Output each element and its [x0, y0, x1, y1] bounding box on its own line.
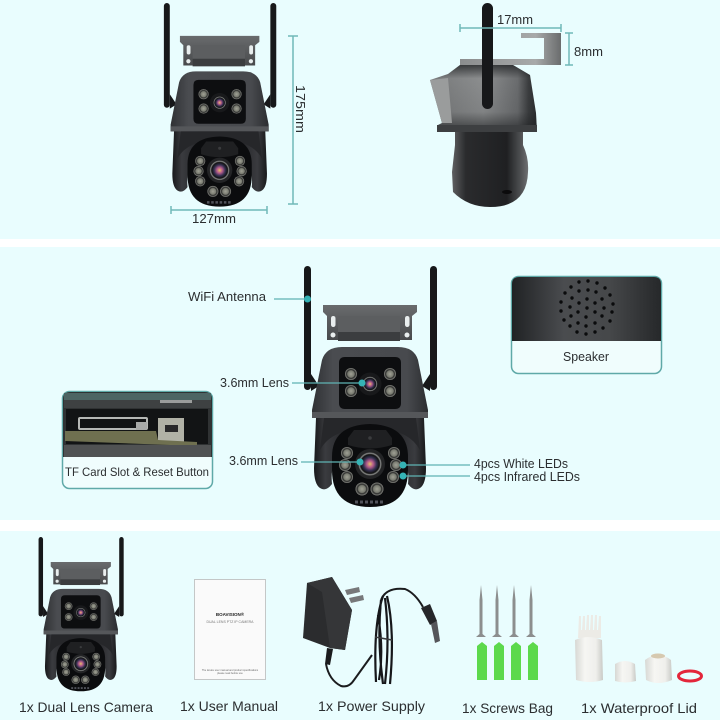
callout: white LEDs [400, 457, 568, 471]
width dimension: 127mm [192, 211, 236, 226]
panel: dimensions background [0, 0, 720, 239]
callout: lower lens: 3.6mm Lens [229, 454, 298, 468]
panel: TF card slot and reset button: TF Card Slot & Reset Button [65, 465, 209, 479]
callout: upper lens [220, 376, 366, 390]
package item: user manual: DUAL LENS PTZ IP CAMERA [206, 620, 254, 624]
width dimension [171, 206, 267, 226]
package item: user manual: please read before use [217, 672, 243, 675]
package item: user manual: The device user manual and product specifications [202, 669, 259, 672]
front view camera [164, 3, 276, 207]
package item: user manual: 1x User Manual [180, 698, 278, 714]
callout: white LEDs: 4pcs White LEDs [474, 457, 568, 471]
package item: screws bag: 1x Screws Bag [462, 700, 553, 716]
panel: speaker [512, 276, 662, 374]
package item: waterproof lid: 1x Waterproof Lid [581, 700, 697, 716]
panel: package contents background [0, 531, 720, 720]
package item: power supply [303, 577, 440, 714]
main camera [304, 266, 437, 507]
panel: speaker: Speaker [563, 350, 609, 364]
callout: infrared LEDs: 4pcs Infrared LEDs [474, 470, 580, 484]
package item: waterproof lid [575, 615, 702, 716]
wall anchors [477, 642, 538, 680]
callout: lower lens [229, 454, 364, 468]
package item: camera: 1x Dual Lens Camera [19, 699, 153, 715]
package item: screws bag [462, 585, 553, 716]
package item: power supply: 1x Power Supply [318, 698, 425, 714]
bracket height dimension: 8mm [574, 44, 603, 59]
speaker holes [559, 279, 615, 336]
panel: TF card slot and reset button [62, 392, 212, 488]
callout: upper lens: 3.6mm Lens [220, 376, 289, 390]
screws [476, 585, 536, 637]
callout: infrared LEDs [400, 470, 580, 484]
depth dimension: 17mm [497, 12, 533, 27]
package item: user manual: BOAVISION® [216, 611, 245, 617]
callout: WiFi antenna [188, 290, 311, 304]
side view camera [430, 3, 561, 207]
panel: features background [0, 247, 720, 520]
package item: user manual [180, 580, 278, 714]
bracket height dimension [565, 33, 603, 65]
depth dimension [460, 12, 561, 32]
callout: WiFi antenna: WiFi Antenna [188, 290, 266, 304]
package item: camera [19, 537, 153, 715]
height dimension [288, 36, 308, 204]
height dimension: 175mm [293, 85, 308, 133]
